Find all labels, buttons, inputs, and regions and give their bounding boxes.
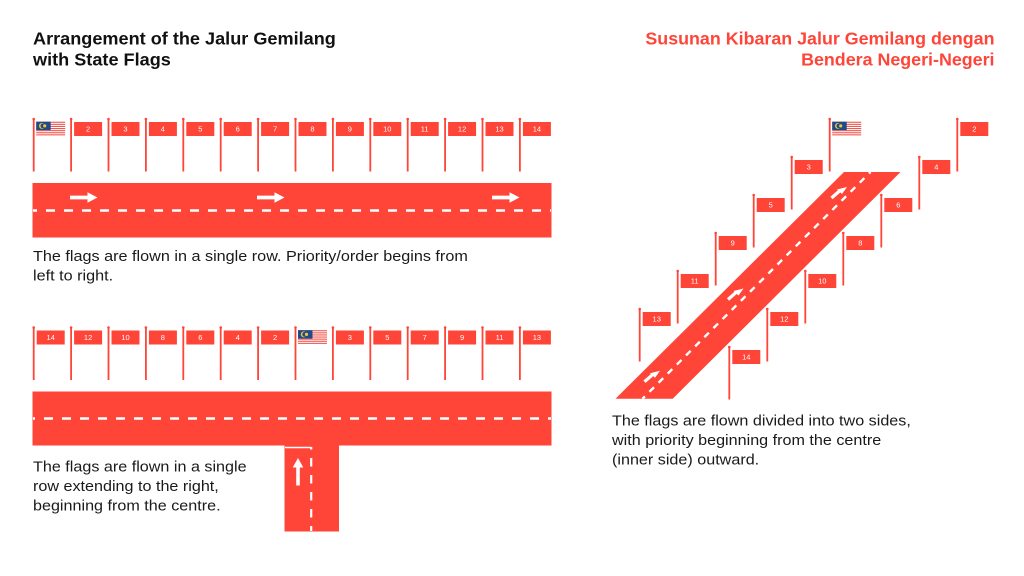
caption: two sides: The flags are flown divided into two sides, xyxy=(612,413,911,429)
arrow xyxy=(293,458,303,486)
flag 12 xyxy=(70,326,102,380)
flag 4 xyxy=(145,118,177,172)
caption: two sides: (inner side) outward. xyxy=(612,452,759,468)
arrow xyxy=(492,192,520,203)
flag 9 xyxy=(714,232,747,286)
flag 9 xyxy=(332,118,364,172)
flag 3: 3 xyxy=(123,125,128,134)
flag 3 xyxy=(332,326,364,380)
flag: Jalur Gemilang xyxy=(294,326,327,380)
flag 5 xyxy=(752,194,785,248)
flag 7: 7 xyxy=(423,333,427,342)
flag 8: 8 xyxy=(310,125,315,134)
flag 3: 3 xyxy=(807,163,811,172)
title: Malay: Susunan Kibaran Jalur Gemilang dengan xyxy=(645,29,994,48)
flag 6: 6 xyxy=(198,333,202,342)
flag 12 xyxy=(444,118,476,172)
caption: T-junction: The flags are flown in a single xyxy=(33,459,247,475)
flag 6: 6 xyxy=(236,125,240,134)
flag 4 xyxy=(219,326,252,380)
flag 9: 9 xyxy=(460,333,464,342)
flag 2: 2 xyxy=(273,333,277,342)
flag 13: 13 xyxy=(653,315,661,324)
title: English: Arrangement of the Jalur Gemilang xyxy=(33,29,336,48)
flag 3: 3 xyxy=(348,333,352,342)
arrow xyxy=(644,371,660,382)
flag 4 xyxy=(918,156,950,210)
flag 7 xyxy=(406,326,439,380)
flag 9: 9 xyxy=(731,239,735,248)
flag 14 xyxy=(32,326,65,380)
flag 7: 7 xyxy=(273,125,277,134)
caption: T-junction: row extending to the right, xyxy=(33,478,219,495)
flag 11 xyxy=(481,326,514,380)
title: Malay: Bendera Negeri-Negeri xyxy=(801,50,994,69)
flag 10: 10 xyxy=(818,277,826,286)
flag 5 xyxy=(369,326,401,380)
flag 8 xyxy=(145,326,177,380)
flag 8: 8 xyxy=(858,239,862,248)
arrow xyxy=(257,192,284,203)
flag 12 xyxy=(766,308,798,362)
flag 6 xyxy=(219,118,252,172)
flag 14: 14 xyxy=(742,353,750,362)
arrow xyxy=(70,192,98,203)
flag: Jalur Gemilang xyxy=(828,118,861,172)
flag 6 xyxy=(880,194,912,248)
flag 3 xyxy=(107,118,140,172)
flag 13: 13 xyxy=(533,333,541,342)
flag 11: 11 xyxy=(496,333,503,342)
flags: two sides xyxy=(638,118,988,399)
flag 13 xyxy=(481,118,514,172)
flag 10: 10 xyxy=(121,333,130,342)
arrow xyxy=(832,187,847,198)
flag 8 xyxy=(294,118,326,172)
title: English: with State Flags xyxy=(32,50,171,69)
flag 11: 11 xyxy=(691,277,699,286)
flag 11: 11 xyxy=(421,125,429,134)
flag 2: 2 xyxy=(972,125,976,134)
panel: single row arrangement xyxy=(32,118,551,284)
flag row: from centre xyxy=(32,326,551,380)
flag: Jalur Gemilang xyxy=(32,118,65,172)
flag 13 xyxy=(638,308,671,362)
road: diagonal xyxy=(616,172,900,399)
flag 2 xyxy=(70,118,102,172)
flag 14: 14 xyxy=(47,333,55,342)
flag 10 xyxy=(804,270,836,324)
flag 4: 4 xyxy=(236,333,240,342)
flag 7 xyxy=(257,118,289,172)
flag row: single row xyxy=(32,118,551,172)
flag 4: 4 xyxy=(934,163,938,172)
road: T-junction xyxy=(32,392,552,532)
flag 4: 4 xyxy=(161,125,165,134)
flag 13 xyxy=(519,326,551,380)
flag 11 xyxy=(676,270,709,324)
flag 9 xyxy=(444,326,476,380)
caption: T-junction: beginning from the centre. xyxy=(33,498,221,514)
flag 3 xyxy=(790,156,823,210)
flag 14 xyxy=(519,118,551,172)
flag 2: 2 xyxy=(86,125,90,134)
flag 12: 12 xyxy=(458,125,466,134)
flag 13: 13 xyxy=(495,125,504,134)
caption: two sides: with priority beginning from the centre xyxy=(611,432,881,449)
flag 8: 8 xyxy=(161,333,165,342)
panel: divided two-sided arrangement xyxy=(611,118,988,468)
flag 14 xyxy=(728,346,760,400)
flag 10 xyxy=(369,118,401,172)
flag 10: 10 xyxy=(383,125,391,134)
flag 5: 5 xyxy=(769,201,773,210)
flag 5: 5 xyxy=(385,333,389,342)
flag 5: 5 xyxy=(198,125,202,134)
flag 5 xyxy=(182,118,214,172)
flag 12: 12 xyxy=(780,315,788,324)
flag 9: 9 xyxy=(348,125,352,134)
flag 14: 14 xyxy=(533,125,541,134)
flag 6 xyxy=(182,326,214,380)
panel: T-junction arrangement xyxy=(32,326,551,532)
arrow xyxy=(728,288,744,300)
flag 2 xyxy=(956,118,988,172)
caption: single row: left to right. xyxy=(33,268,113,284)
flag 12: 12 xyxy=(84,333,92,342)
flag 2 xyxy=(257,326,289,380)
flag 6: 6 xyxy=(896,201,900,210)
flag 8 xyxy=(842,232,874,286)
caption: single row: The flags are flown in a single row. Priority/order begins from xyxy=(33,249,468,265)
flag 10 xyxy=(107,326,140,380)
road: straight xyxy=(32,183,552,238)
flag 11 xyxy=(406,118,439,172)
